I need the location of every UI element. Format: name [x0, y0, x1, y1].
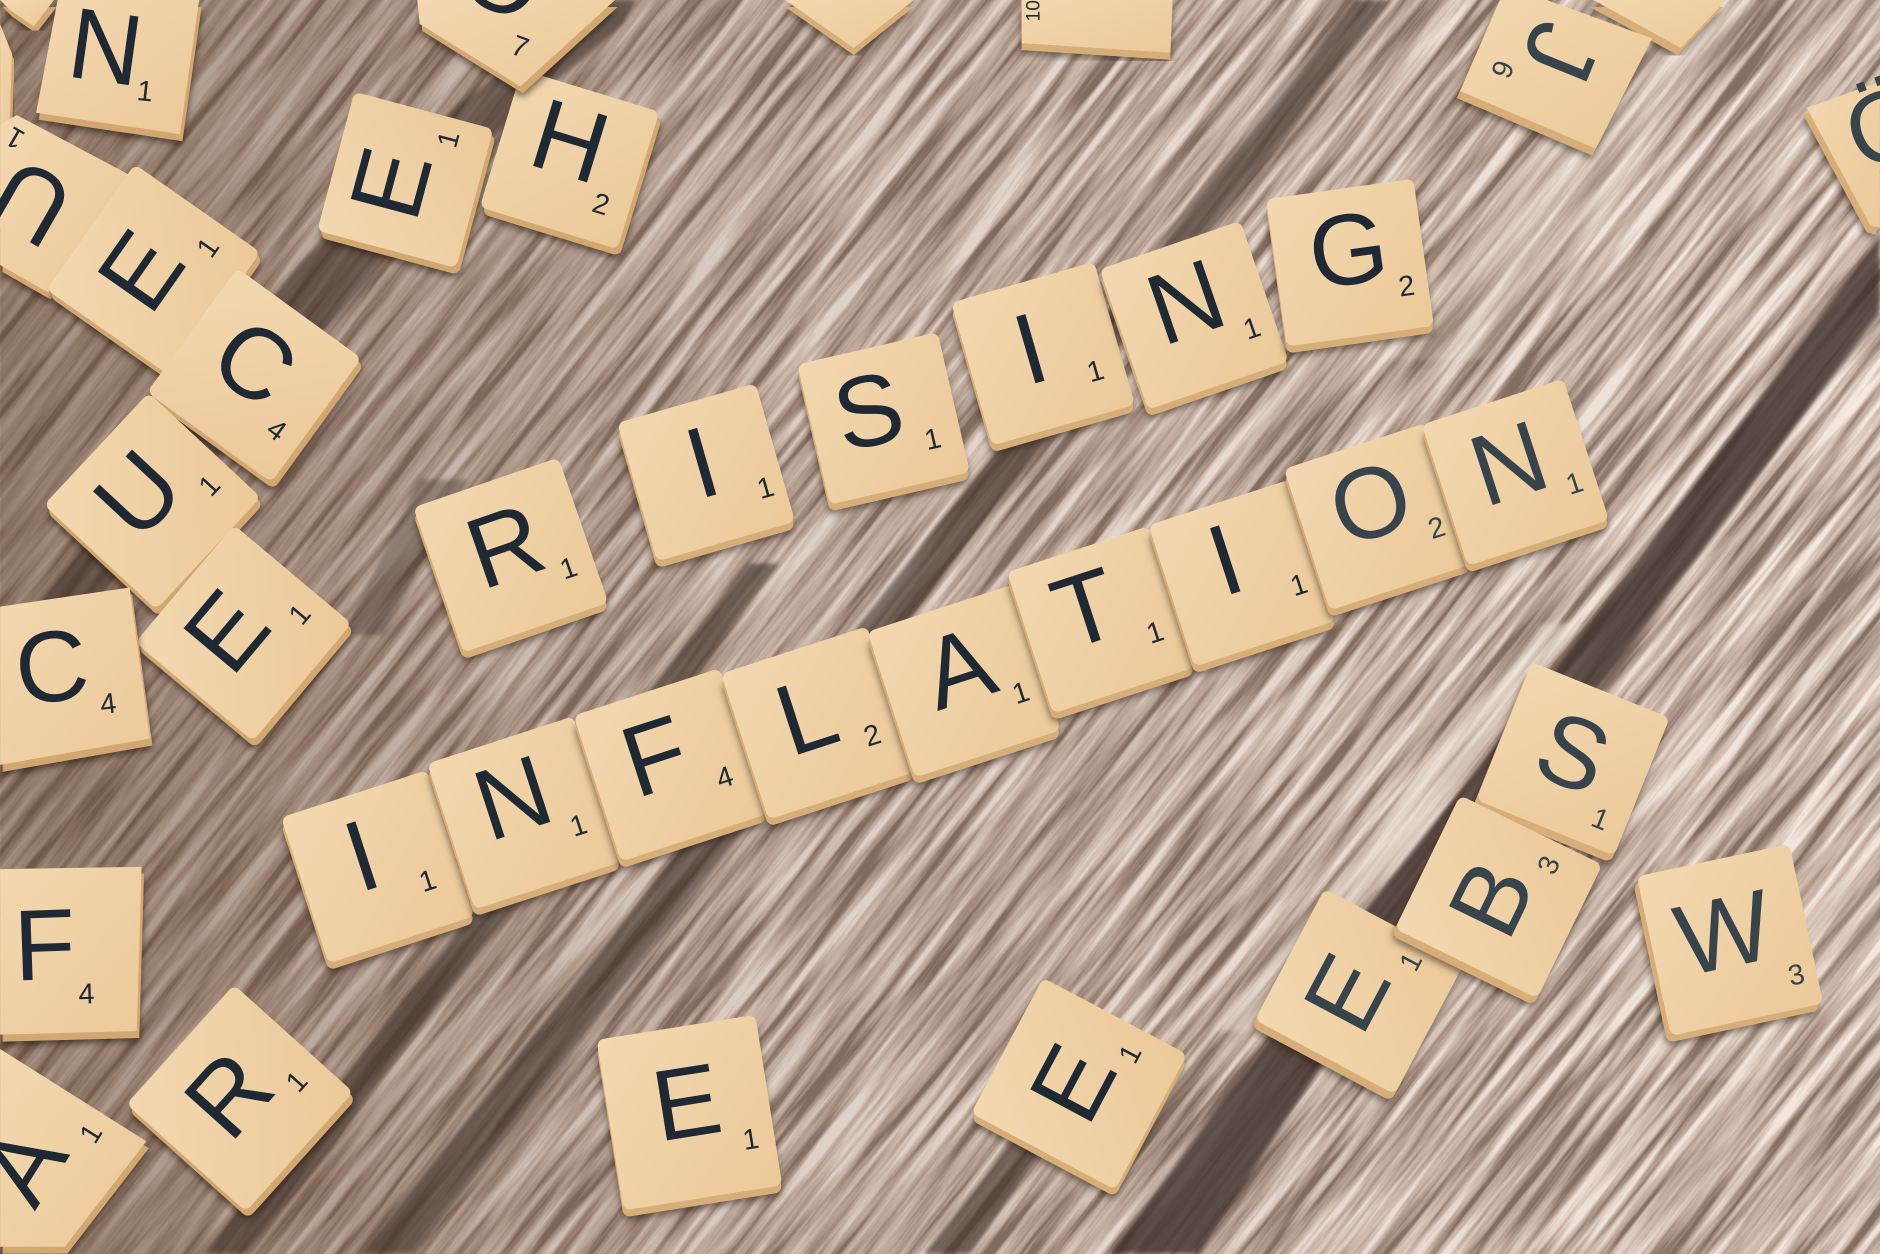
tile: I: 1 [1287, 568, 1312, 603]
tile: L: L [763, 654, 851, 778]
tile: C: C [9, 607, 95, 727]
tile: T: 1 [1143, 615, 1168, 651]
tile: A [0, 1049, 146, 1247]
tile: E: E [645, 1042, 729, 1163]
tile: I [617, 383, 795, 561]
tile: top number fragment [1022, 0, 1173, 53]
tile: S: 1 [921, 422, 944, 457]
tile: I: I [1195, 503, 1256, 618]
tile: N: 1 [135, 75, 155, 108]
tile: H: H [519, 77, 621, 206]
tile: N: 1 [1562, 466, 1587, 502]
tile: U: 1 [0, 120, 30, 155]
tile: E: 1 [740, 1123, 761, 1157]
scattered tiles: top edge and right [785, 0, 1880, 228]
tile: I: 1 [754, 471, 778, 506]
tile: N: N [461, 734, 565, 863]
tile: E: E [76, 211, 206, 331]
tile: S: 1 [1587, 802, 1614, 837]
scattered tiles: top left cluster [0, 0, 660, 765]
tile: R: R [453, 482, 558, 611]
tile: I [1148, 479, 1336, 667]
tile: E [597, 1015, 782, 1210]
tile: R: R [163, 1031, 295, 1159]
tile: O umlaut [1807, 61, 1880, 228]
tile: G [1266, 179, 1434, 346]
tile: E [135, 525, 352, 741]
tile: U: 1 [193, 469, 227, 503]
tile: R: 1 [280, 1065, 314, 1099]
tile: E: E [1008, 1027, 1139, 1139]
tile: partly hidden O with number 7 [417, 0, 615, 86]
tile: G: G [1302, 189, 1395, 311]
tile: C: 4 [98, 687, 118, 721]
tile: top number fragment: 10 [1024, 0, 1045, 21]
tile: J [1460, 0, 1652, 149]
tile: U [44, 393, 261, 610]
tile: F: 4 [712, 760, 737, 796]
tile: I: 1 [415, 864, 440, 899]
tile: E [971, 978, 1187, 1190]
tile: I: I [1002, 292, 1060, 407]
tile: I: I [331, 799, 392, 914]
tile: L: 2 [860, 718, 885, 754]
tile: R [413, 458, 608, 653]
tile: N: 1 [1239, 311, 1265, 347]
tile: T [1007, 526, 1194, 713]
tile: B: 3 [1531, 851, 1567, 880]
scattered tiles: bottom centre and right [597, 662, 1823, 1210]
tile: F: F [608, 694, 702, 820]
tile: S: S [823, 349, 914, 474]
tile: E: E [162, 570, 291, 693]
tile: W [1637, 844, 1823, 1036]
tile: E: E [1282, 937, 1413, 1049]
tile: N: 1 [566, 808, 591, 844]
tile: S [1476, 662, 1670, 856]
tile: B: B [1427, 844, 1557, 953]
tile: U: U [72, 430, 204, 559]
tile: N: N [1133, 238, 1239, 367]
tile: U [0, 115, 132, 293]
tile: F: 4 [78, 978, 95, 1011]
tile: R [126, 985, 353, 1212]
tile: top right fragment [1593, 0, 1726, 48]
tile: S [797, 332, 970, 505]
tile: E [317, 92, 493, 268]
tile: T: T [1039, 546, 1132, 672]
tile: F: F [12, 888, 77, 1003]
tile: A: 1 [74, 1119, 109, 1149]
tile: S: S [1521, 689, 1625, 818]
tile: left edge sliver [0, 24, 12, 125]
tile: E: E [329, 137, 454, 230]
tile: H: 2 [589, 187, 613, 222]
tile: A [867, 584, 1061, 778]
tile: R: 1 [556, 551, 582, 586]
tile: F [574, 668, 767, 862]
tile: A: 1 [1008, 676, 1033, 711]
word: INFLATION [281, 379, 1609, 963]
tile: top fragment [785, 0, 914, 48]
tile: C [0, 587, 150, 765]
tile: N: N [1457, 399, 1561, 528]
tile: I [951, 262, 1135, 446]
tile: O: 2 [1424, 511, 1449, 546]
tile: N [36, 0, 199, 134]
tile: O [1284, 423, 1471, 610]
tile: G: 2 [1397, 270, 1417, 304]
tile: C: C [192, 296, 317, 430]
tile: C [147, 268, 361, 482]
tile: B [1395, 795, 1602, 998]
tile: E [1255, 889, 1464, 1094]
tile: I [281, 770, 474, 963]
tile: E: 1 [1393, 947, 1429, 976]
tile: A: A [909, 605, 1008, 732]
tile: partly hidden O with number 7: 7 [507, 29, 533, 65]
word: RISING [413, 179, 1434, 653]
tile: corner fragment [0, 0, 54, 26]
tile: O: O [1316, 438, 1425, 569]
tile: H [480, 68, 660, 249]
tile: E [47, 164, 260, 378]
tile: W: W [1666, 869, 1782, 998]
tile: F [0, 867, 142, 1035]
tile: N [427, 716, 621, 910]
tile: I: I [673, 405, 731, 521]
tile: J: J [1499, 7, 1622, 96]
tile: E: 1 [283, 598, 318, 631]
tile: N [1422, 379, 1609, 566]
tile: W: 3 [1785, 958, 1808, 993]
tile: N [1100, 221, 1289, 410]
tile: J: 6 [1484, 55, 1520, 82]
tile: E: 1 [1113, 1040, 1149, 1069]
tile: L [721, 626, 914, 820]
tile: E: 1 [191, 232, 226, 264]
tile: C: 4 [260, 413, 292, 448]
tile: I: 1 [1084, 354, 1108, 389]
tile: E: 1 [431, 128, 467, 151]
scattered tiles: bottom left [0, 867, 353, 1247]
